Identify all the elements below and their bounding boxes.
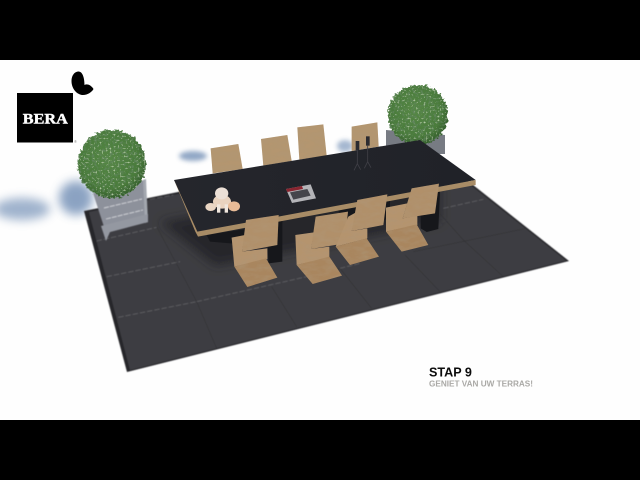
plush toy (205, 187, 240, 213)
table and chairs (174, 122, 476, 287)
candle holders on table (354, 146, 371, 170)
step subtitle: GENIET VAN UW TERRAS! (429, 380, 533, 388)
light grout lines (97, 195, 483, 317)
chair: front D (386, 184, 439, 252)
chair: front A (232, 215, 279, 287)
tile joints (157, 210, 527, 348)
logo square (17, 93, 73, 142)
magazine (286, 184, 316, 203)
table wood edge (174, 180, 476, 237)
planter: right (386, 130, 445, 154)
table legs (207, 191, 440, 263)
caption (429, 366, 533, 388)
candle sleeves (356, 136, 370, 150)
registered mark: ® (74, 139, 77, 144)
back row chairs (211, 122, 379, 173)
white backdrop (0, 60, 640, 420)
chair: front C (336, 194, 387, 265)
shadow under table (160, 170, 440, 266)
plant: right boxwood ball (388, 85, 448, 145)
logo wordmark: BERA (23, 112, 68, 128)
chair: front B (295, 212, 348, 284)
terrace deck (84, 143, 569, 372)
logo leaf (72, 71, 94, 95)
plant: left boxwood ball (78, 130, 146, 198)
planter: left (93, 179, 148, 241)
step title: STAP 9 (429, 366, 472, 380)
cast shadows (0, 140, 353, 220)
BERA logo (17, 71, 94, 144)
table top (174, 140, 476, 232)
